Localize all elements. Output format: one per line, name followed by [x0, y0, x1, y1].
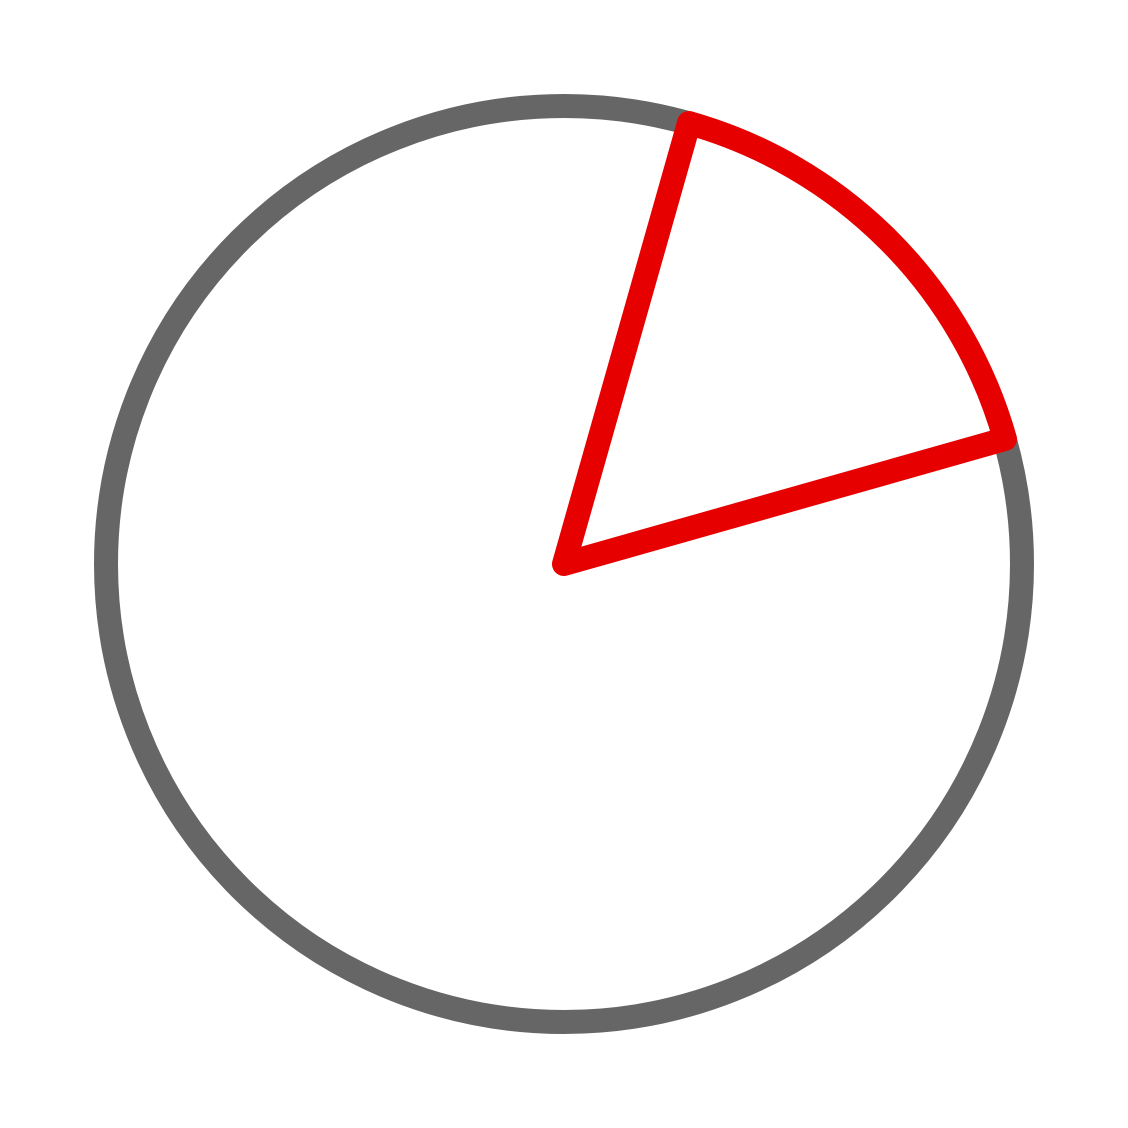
red highlighted slice [564, 123, 1005, 564]
grey circle outline [106, 106, 1022, 1022]
